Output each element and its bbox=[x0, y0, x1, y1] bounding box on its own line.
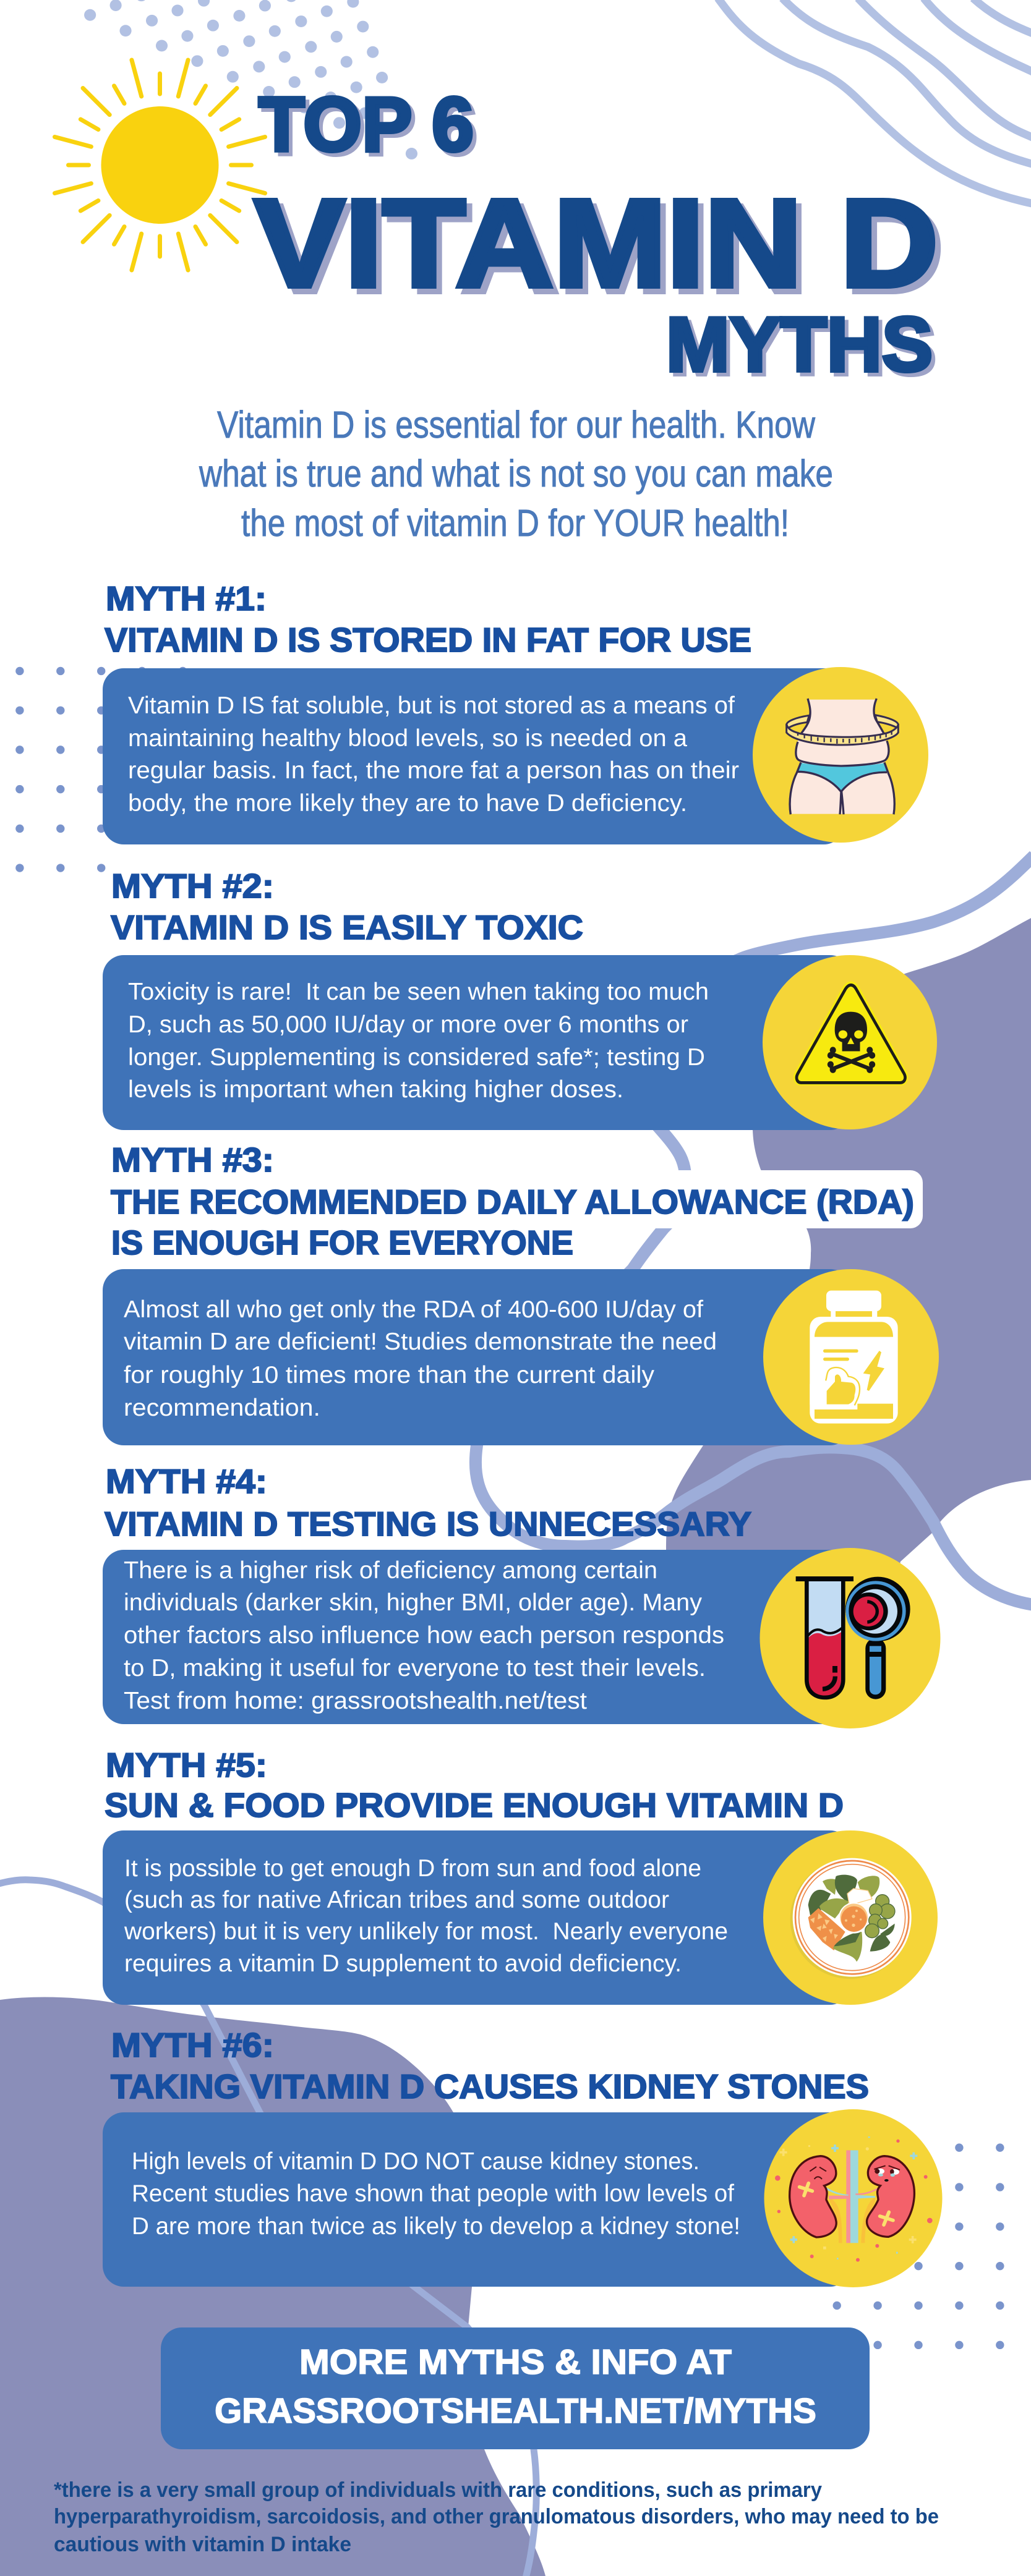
myth 6 heading: TAKING VITAMIN D CAUSES KIDNEY STONES bbox=[111, 2067, 869, 2106]
myth 1 text: maintaining healthy blood levels, so is needed on a bbox=[128, 725, 687, 752]
myth 4 text: There is a higher risk of deficiency among certain bbox=[124, 1557, 657, 1584]
myth 6 text: D are more than twice as likely to develop a kidney stone! bbox=[132, 2213, 740, 2240]
myth 5 text: requires a vitamin D supplement to avoid deficiency. bbox=[124, 1950, 682, 1977]
panel: myth 5 bbox=[103, 1830, 938, 2005]
intro text: the most of vitamin D for YOUR health! bbox=[241, 502, 789, 544]
footnote: hyperparathyroidism, sarcoidosis, and other granulomatous disorders, who may need to be bbox=[54, 2505, 939, 2528]
myth 6 heading bbox=[111, 2026, 869, 2106]
myth 5 text: (such as for native African tribes and some outdoor bbox=[124, 1887, 669, 1913]
myth 3 heading bbox=[99, 1141, 923, 1262]
title: top 6: TOP 6 bbox=[262, 86, 477, 171]
intro text: Vitamin D is essential for our health. Know bbox=[217, 404, 816, 446]
myth 1 text bbox=[128, 692, 739, 817]
panel: myth 6 bbox=[103, 2109, 943, 2287]
myth 4 heading: MYTH #4: bbox=[106, 1462, 267, 1500]
myth 4 text: individuals (darker skin, higher BMI, older age). Many bbox=[124, 1589, 702, 1616]
icon: poison warning sign bbox=[763, 955, 937, 1129]
panel: myth 1 bbox=[103, 667, 928, 844]
decorative dots left bbox=[15, 667, 187, 872]
icon: test tube and magnifier bbox=[759, 1548, 940, 1728]
curved line: upper right bbox=[476, 856, 1031, 1605]
icon: supplement bottle bbox=[763, 1269, 939, 1445]
background blob: upper right bbox=[666, 918, 1031, 1706]
title: myths: MYTHS bbox=[670, 306, 936, 391]
myth 5 heading: SUN & FOOD PROVIDE ENOUGH VITAMIN D bbox=[105, 1786, 844, 1824]
title: vitamin d: VITAMIN D bbox=[254, 173, 938, 313]
icon: waist measure bbox=[753, 667, 928, 843]
myth 2 text: Toxicity is rare! It can be seen when taking too much bbox=[128, 979, 709, 1005]
myth 6 text bbox=[132, 2148, 740, 2240]
myth 6 heading: MYTH #6: bbox=[111, 2026, 274, 2064]
myth 4 heading: VITAMIN D TESTING IS UNNECESSARY bbox=[105, 1505, 751, 1543]
myth 2 text: D, such as 50,000 IU/day or more over 6 months or bbox=[128, 1011, 688, 1038]
myth 4 heading bbox=[105, 1462, 751, 1543]
intro text: what is true and what is not so you can make bbox=[199, 453, 833, 495]
myth 1 heading bbox=[105, 579, 751, 659]
decorative dots lower right bbox=[833, 2143, 1004, 2349]
decorative dots top left bbox=[84, 0, 417, 159]
myth 3 heading: THE RECOMMENDED DAILY ALLOWANCE (RDA) bbox=[111, 1183, 914, 1221]
myth 3 text: vitamin D are deficient! Studies demonstrate the need bbox=[124, 1328, 717, 1355]
call to action text: GRASSROOTSHEALTH.NET/MYTHS bbox=[215, 2391, 816, 2431]
myth 5 text bbox=[124, 1855, 728, 1977]
panel: myth 4 bbox=[103, 1548, 940, 1728]
footnote bbox=[54, 2478, 939, 2556]
myth 4 text bbox=[124, 1557, 724, 1714]
curved line: lower left bbox=[0, 1880, 536, 2576]
myth 2 text bbox=[128, 979, 709, 1103]
myth 2 text: longer. Supplementing is considered safe*; testing D bbox=[128, 1044, 705, 1071]
myth 3 heading: IS ENOUGH FOR EVERYONE bbox=[111, 1223, 573, 1262]
myth 3 text: for roughly 10 times more than the current daily bbox=[124, 1362, 655, 1388]
myth 5 heading: MYTH #5: bbox=[106, 1746, 267, 1784]
panel: myth 2 bbox=[103, 955, 937, 1130]
myth 5 text: workers) but it is very unlikely for most. Nearly everyone bbox=[124, 1918, 728, 1945]
myth 2 heading: MYTH #2: bbox=[111, 867, 274, 905]
myth 1 text: Vitamin D IS fat soluble, but is not stored as a means of bbox=[128, 692, 735, 719]
myth 2 text: levels is important when taking higher doses. bbox=[128, 1076, 623, 1103]
myth 3 heading: MYTH #3: bbox=[111, 1141, 274, 1179]
title: top 6: TOP 6 bbox=[259, 82, 474, 168]
myth 3 text: recommendation. bbox=[124, 1395, 320, 1421]
myth 2 heading: VITAMIN D IS EASILY TOXIC bbox=[111, 908, 583, 946]
decorative waves top right bbox=[718, 0, 1031, 204]
title: vitamin d: VITAMIN D bbox=[260, 179, 944, 318]
intro text bbox=[199, 404, 833, 544]
icon: plate of food bbox=[763, 1830, 938, 2005]
icon: kidneys bbox=[764, 2109, 943, 2287]
myth 4 text: to D, making it useful for everyone to test their levels. bbox=[124, 1655, 706, 1681]
footnote: cautious with vitamin D intake bbox=[54, 2533, 351, 2556]
myth 1 heading: VITAMIN D IS STORED IN FAT FOR USE bbox=[105, 621, 751, 659]
myth 5 text: It is possible to get enough D from sun and food alone bbox=[124, 1855, 701, 1882]
myth 1 text: body, the more likely they are to have D deficiency. bbox=[128, 790, 687, 817]
title: myths: MYTHS bbox=[666, 302, 933, 388]
myth 4 text: other factors also influence how each person responds bbox=[124, 1622, 724, 1649]
icon: sun bbox=[54, 60, 265, 270]
call to action box bbox=[161, 2327, 870, 2449]
footnote: *there is a very small group of individuals with rare conditions, such as primary bbox=[54, 2478, 822, 2502]
myth 6 text: Recent studies have shown that people with low levels of bbox=[132, 2180, 734, 2207]
myth 1 text: regular basis. In fact, the more fat a person has on their bbox=[128, 757, 739, 784]
myth 4 text: Test from home: grassrootshealth.net/test bbox=[124, 1688, 587, 1714]
background blob: lower left bbox=[0, 1997, 545, 2576]
myth 1 heading: MYTH #1: bbox=[106, 579, 267, 618]
myth 2 heading bbox=[111, 867, 583, 946]
panel: myth 3 bbox=[103, 1269, 939, 1445]
call to action text bbox=[215, 2342, 816, 2431]
white highlight behind heading bbox=[99, 1170, 923, 1228]
myth 3 text: Almost all who get only the RDA of 400-600 IU/day of bbox=[124, 1296, 703, 1323]
myth 3 text bbox=[124, 1296, 717, 1421]
call to action text: MORE MYTHS & INFO AT bbox=[299, 2342, 732, 2382]
myth 5 heading bbox=[105, 1746, 844, 1824]
myth 6 text: High levels of vitamin D DO NOT cause kidney stones. bbox=[132, 2148, 699, 2175]
